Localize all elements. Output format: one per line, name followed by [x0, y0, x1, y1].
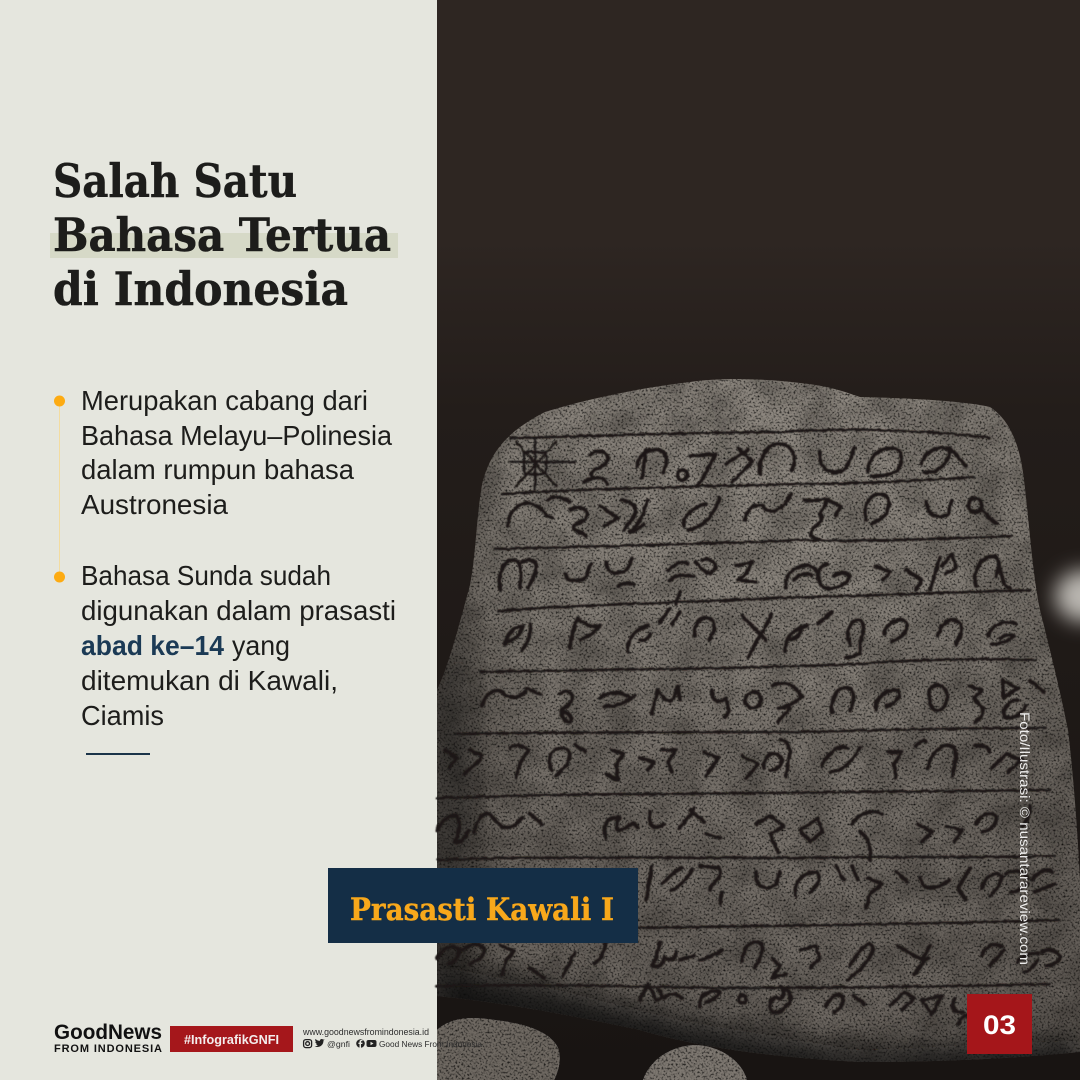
bullet text 2: ditemukan di Kawali, — [81, 665, 338, 696]
page number badge — [967, 994, 1032, 1054]
hashtag badge — [170, 1026, 293, 1052]
title highlight — [50, 233, 398, 258]
small rock centre — [643, 1045, 747, 1080]
caption label: Prasasti Kawali I — [328, 868, 638, 943]
left background panel — [0, 0, 437, 1080]
carved ruled lines — [437, 430, 1060, 988]
bullet text 1 — [81, 385, 393, 520]
inscription row 3 — [500, 554, 1010, 604]
inscription row 7 — [437, 806, 1030, 860]
page number badge: 03 — [983, 1010, 1016, 1040]
photo: Prasasti Kawali stone — [437, 0, 1080, 1080]
title line 3: di Indonesia — [53, 262, 348, 316]
stone slab — [437, 370, 1080, 1080]
title line 2: Bahasa Tertua — [53, 208, 391, 262]
carved inscription — [437, 437, 1060, 1030]
bullet text 1: Austronesia — [81, 489, 229, 520]
footer logo: GoodNews From Indonesia: FROM INDONESIA — [54, 1043, 162, 1055]
hashtag badge: #InfografikGNFI — [184, 1033, 279, 1047]
short divider rule — [86, 753, 150, 755]
icon: facebook — [356, 1039, 365, 1048]
bullet text 2 — [81, 560, 396, 731]
inscription row 4 — [505, 608, 1016, 658]
bullet 2 — [54, 572, 65, 582]
bullet text 2: digunakan dalam prasasti — [81, 595, 396, 626]
bullet 1 — [54, 396, 65, 406]
photo credit: Foto/Ilustrasi: © nusantarareview.com — [1017, 712, 1033, 965]
footer website and social handles: Good News From Indonesia — [379, 1039, 482, 1049]
star symbol — [510, 437, 575, 490]
bullet timeline — [54, 396, 65, 582]
footer logo: GoodNews From Indonesia — [54, 1021, 162, 1055]
footer website and social handles — [302, 1027, 482, 1049]
inscription row 2 — [508, 494, 996, 540]
inscription row 8 — [646, 866, 1055, 908]
footer logo: GoodNews From Indonesia: GoodNews — [54, 1021, 162, 1044]
small rock left — [437, 1018, 560, 1080]
bullet text 1: Merupakan cabang dari — [81, 385, 368, 416]
bullet text 2: Bahasa Sunda sudah — [81, 560, 331, 591]
bullet text 2: yang — [232, 630, 290, 661]
bullet text 1: Bahasa Melayu–Polinesia — [81, 420, 393, 451]
photo backdrop — [437, 0, 1080, 1080]
title — [50, 154, 398, 316]
inscription row 10 — [640, 984, 986, 1030]
footer website and social handles: @gnfi — [327, 1039, 350, 1049]
inscription row 6 — [445, 740, 1022, 780]
icon: twitter — [314, 1039, 325, 1047]
icon: youtube — [366, 1040, 376, 1047]
bullet text 2: Ciamis — [81, 700, 164, 731]
icon: instagram — [304, 1040, 312, 1048]
bullet text 2: abad ke–14 — [81, 630, 225, 661]
bullet text 1: dalam rumpun bahasa — [81, 454, 355, 485]
caption label: Prasasti Kawali I: Prasasti Kawali I — [350, 892, 614, 928]
inscription row 9 — [437, 938, 1060, 980]
inscription row 1 — [584, 444, 966, 486]
footer website and social handles: www.goodnewsfromindonesia.id — [302, 1027, 429, 1037]
title line 1: Salah Satu — [53, 154, 297, 208]
inscription row 5 — [482, 680, 1044, 722]
